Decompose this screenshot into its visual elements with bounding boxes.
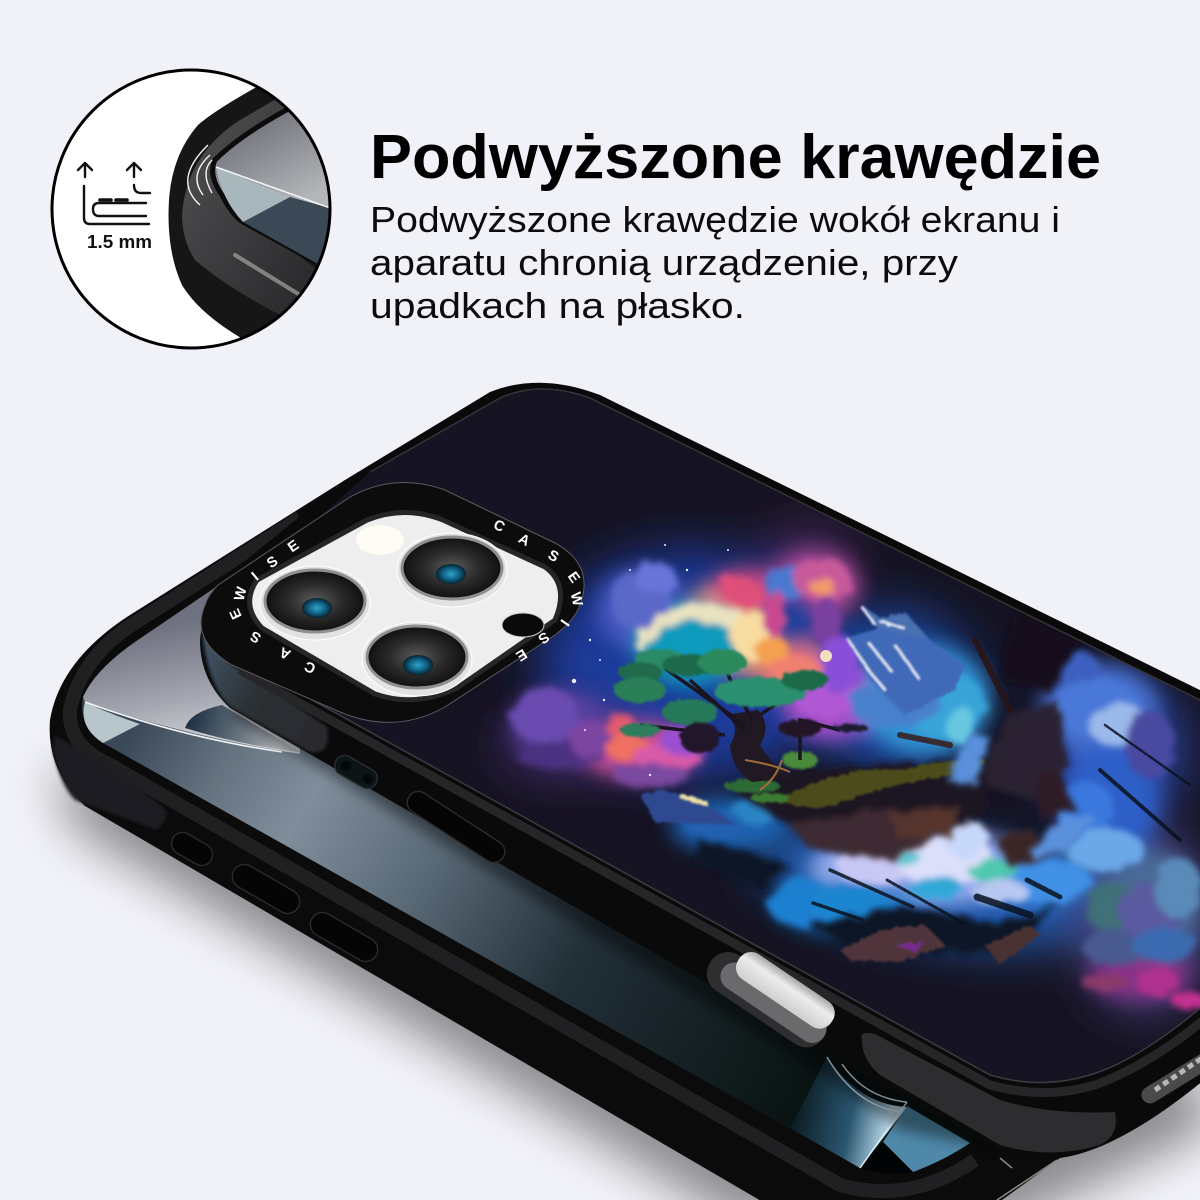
front corner guard right <box>861 1033 1116 1152</box>
inset border <box>52 70 330 348</box>
front phone <box>200 370 1200 1158</box>
rear corner guard <box>53 735 166 830</box>
inset case translucent band <box>182 100 315 314</box>
top edge glossy line <box>370 389 1200 705</box>
camera window <box>250 512 561 700</box>
artwork soft colour washes <box>512 550 1200 999</box>
inset disc <box>52 70 330 348</box>
brand ring text: CASEWISE: C <box>490 517 508 536</box>
wallpaper arc line <box>85 702 282 752</box>
rear button: volume up <box>228 860 304 918</box>
artwork edge line <box>240 660 1200 1082</box>
artwork rocks and island <box>692 611 1082 957</box>
brand ring text: CASEWISE: S <box>545 547 561 566</box>
description line 1: Podwyższone krawędzie wokół ekranu i <box>370 199 1060 240</box>
lens left <box>260 566 370 640</box>
description line 2: aparatu chronią urządzenie, przy <box>370 242 958 283</box>
bottom speaker detail <box>1150 1056 1200 1095</box>
lens bottom <box>362 622 472 696</box>
artwork waterfalls <box>945 735 1095 860</box>
inset white arcs <box>188 145 212 205</box>
rear phone with screen <box>50 480 1060 1200</box>
brand ring text: CASEWISE: W <box>567 591 585 608</box>
rear phone rim highlight <box>70 518 975 1191</box>
brand ring text: CASEWISE: S <box>264 553 282 572</box>
inset screen grey <box>213 108 335 270</box>
wallpaper grey panel <box>83 530 300 754</box>
mute switch <box>331 752 381 792</box>
charging port silver button <box>699 934 842 1055</box>
artwork pine trees <box>813 640 1190 923</box>
moon <box>820 650 832 662</box>
rear button: volume down <box>306 908 382 966</box>
brand ring text: CASEWISE: S <box>248 627 264 646</box>
brand ring text: CASEWISE: S <box>534 628 552 647</box>
brand ring text: CASEWISE <box>227 517 585 676</box>
description text <box>370 199 1060 326</box>
wallpaper pale blue panel <box>83 702 140 743</box>
artwork lower rocks <box>724 751 1040 965</box>
artwork painted clouds <box>511 558 1200 1009</box>
inset case body <box>168 88 316 338</box>
inset pale blue wedge <box>216 167 290 222</box>
brand ring text: CASEWISE: A <box>277 643 293 662</box>
rear phone case body <box>50 480 1060 1200</box>
label: 1.5 mm: 1.5 mm <box>87 232 152 252</box>
description line 3: upadkach na płasko. <box>370 285 745 326</box>
microphone hole <box>502 613 544 637</box>
lens top right <box>397 533 507 607</box>
brand ring text: CASEWISE: E <box>564 569 583 587</box>
artwork stars <box>572 544 729 776</box>
inset dark wedge <box>243 197 330 268</box>
brand ring text: CASEWISE: I <box>249 570 262 584</box>
title: Podwyższone krawędzie <box>370 123 1101 192</box>
wallpaper blue flare <box>790 1057 907 1168</box>
circular detail inset <box>52 70 340 348</box>
brand ring text: CASEWISE: E <box>513 645 529 664</box>
inset bright rim streak <box>235 255 300 295</box>
wallpaper dark wedge <box>185 705 300 752</box>
rear button: action <box>167 828 217 870</box>
brand ring text: CASEWISE: I <box>557 616 572 629</box>
inset white line <box>216 167 330 208</box>
front rim highlight <box>240 670 1200 1092</box>
camera module <box>201 482 585 722</box>
drop shadow under phones <box>50 770 1200 1200</box>
tree canopy <box>614 649 868 754</box>
brand ring text: CASEWISE: E <box>285 537 303 556</box>
shadow of front phone on rear screen <box>230 620 1000 1150</box>
artwork tree <box>614 649 868 790</box>
flash <box>356 525 404 555</box>
artwork dark base <box>322 390 1200 1082</box>
inset phone corner close-up <box>168 88 328 338</box>
rear phone port detail <box>997 1158 1057 1200</box>
wallpaper black triangle <box>860 1142 913 1173</box>
brand ring text: CASEWISE: A <box>515 531 533 550</box>
front corner guard left <box>203 628 328 752</box>
brand ring text: CASEWISE: E <box>227 606 246 621</box>
rear phone screen <box>82 530 1010 1172</box>
brand ring text: CASEWISE: W <box>232 585 251 603</box>
wallpaper blue flare right <box>883 1106 970 1172</box>
brand ring text: CASEWISE: C <box>302 657 318 676</box>
front phone case body <box>200 383 1200 1158</box>
camera outer ring <box>201 482 584 722</box>
tree trunk and branches <box>725 710 790 782</box>
side button <box>403 787 509 867</box>
wallpaper white curves <box>827 1057 907 1168</box>
artwork mountains <box>640 605 965 825</box>
icon: raised edge diagram with arrows <box>78 163 150 224</box>
artwork nebula glow <box>500 529 1200 1010</box>
artwork panel <box>322 390 1200 1082</box>
